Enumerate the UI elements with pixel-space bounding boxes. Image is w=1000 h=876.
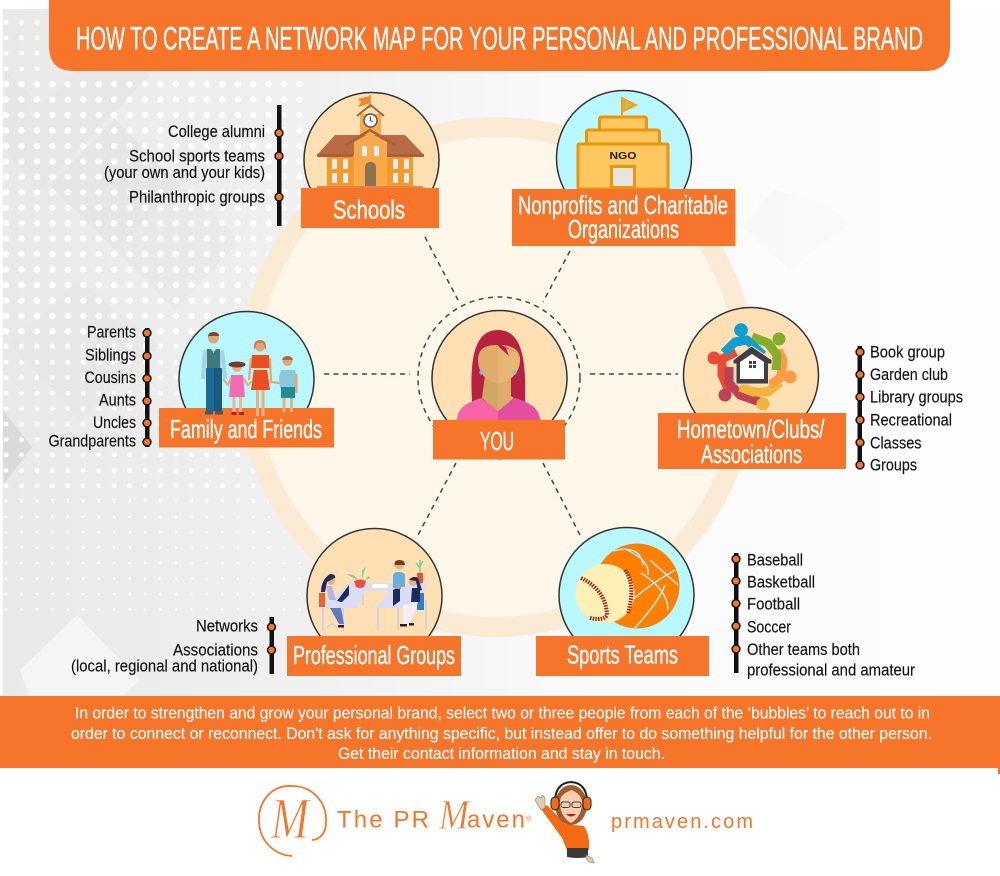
- panel: nonprofits: [512, 90, 736, 246]
- label: hometown: Associations: [701, 439, 802, 469]
- wordmark: ®: [526, 815, 532, 823]
- list: sports: [732, 552, 915, 680]
- bubble: hometown: [684, 308, 818, 442]
- bubble: family: [179, 312, 314, 446]
- list: sports: Other teams both: [747, 641, 860, 659]
- bubble: sports: [559, 528, 694, 662]
- icon: community ring with house: [708, 323, 796, 410]
- list: schools: Philanthropic groups: [129, 188, 265, 206]
- list: hometown: Garden club: [870, 366, 948, 384]
- bottom call to action band: In order to strengthen and grow your personal brand, select two or three people from each of the ‘bubbles’ to reach out to in: [75, 704, 930, 722]
- list: family: Uncles: [93, 414, 136, 432]
- list: family: Siblings: [85, 346, 136, 364]
- list: schools: [104, 105, 283, 226]
- label: family: [159, 408, 334, 448]
- list: sports: Basketball: [747, 574, 815, 592]
- list: schools: (your own and your kids): [104, 164, 265, 182]
- bottom call to action band: [0, 696, 1000, 774]
- list: sports: Soccer: [747, 618, 791, 636]
- label: schools: [301, 188, 439, 228]
- list: family: Cousins: [84, 369, 136, 387]
- list: hometown: Classes: [870, 434, 922, 452]
- label: nonprofits: [512, 189, 736, 246]
- icon: caricature with headphones: [535, 782, 594, 863]
- panel: you: [432, 310, 567, 460]
- large background circle: [247, 127, 747, 627]
- icon: NGO building: [578, 97, 668, 189]
- wordmark: aven: [467, 806, 525, 834]
- list: hometown: Recreational: [870, 412, 952, 430]
- list: hometown: Book group: [870, 344, 945, 362]
- list: professional: Associations: [173, 642, 258, 660]
- list: sports: professional and amateur: [747, 662, 915, 680]
- bottom call to action band: Get their contact information and stay in touch.: [338, 744, 665, 763]
- wordmark: M: [438, 793, 471, 839]
- label: sports: Sports Teams: [567, 640, 678, 670]
- label: professional: Professional Groups: [293, 640, 455, 670]
- list: sports: Football: [747, 596, 800, 614]
- wordmark: [337, 793, 532, 839]
- panel: professional groups: [71, 528, 461, 676]
- list: family: [48, 324, 151, 450]
- label: you: YOU: [480, 426, 514, 456]
- label: you: [433, 420, 565, 460]
- icon: M monogram circle: [259, 786, 326, 856]
- icon: office team at desks: [319, 560, 428, 631]
- bubble: you: [432, 310, 567, 446]
- bubble: nonprofits: [556, 90, 692, 226]
- icon: basketball and baseball: [576, 544, 680, 628]
- title banner: [49, 0, 950, 71]
- list: family: Parents: [87, 324, 136, 342]
- label: family: Family and Friends: [170, 414, 322, 444]
- list: professional: (local, regional and national): [71, 658, 258, 676]
- list: schools: School sports teams: [129, 148, 265, 166]
- url: prmaven.com: [611, 811, 753, 833]
- label: sports: [536, 636, 709, 676]
- label: schools: Schools: [333, 194, 405, 224]
- dashed connector lines: [324, 237, 678, 537]
- label: professional: [287, 636, 461, 676]
- panel: sports teams: [536, 528, 915, 680]
- bubble: professional: [307, 528, 442, 664]
- footer logo: The PR Maven: [259, 786, 753, 856]
- label: nonprofits: Nonprofits and Charitable: [518, 190, 728, 220]
- list: family: Aunts: [99, 392, 136, 410]
- list: sports: Baseball: [747, 552, 803, 570]
- label: hometown: [658, 413, 846, 469]
- icon: family figures: [201, 332, 298, 416]
- list: schools: College alumni: [168, 123, 265, 141]
- panel: hometown: [658, 308, 963, 474]
- list: professional: [71, 617, 275, 676]
- panel: family and friends: [48, 312, 334, 450]
- icon: NGO building: NGO: [610, 150, 636, 162]
- label: hometown: Hometown/Clubs/: [677, 414, 825, 444]
- icon: school building: [317, 95, 424, 188]
- bottom call to action band: order to connect or reconnect. Don't ask for anything specific, but instead offer to do something helpful for the other person.: [71, 724, 932, 743]
- list: professional: Networks: [196, 618, 258, 636]
- list: hometown: [856, 344, 963, 474]
- wordmark: The PR: [337, 806, 429, 834]
- bubble: schools: [304, 92, 439, 228]
- icon: M monogram circle: M: [270, 786, 311, 851]
- list: hometown: Groups: [870, 456, 917, 474]
- label: nonprofits: Organizations: [568, 214, 679, 244]
- list: hometown: Library groups: [870, 388, 963, 406]
- icon: woman portrait: [457, 330, 540, 420]
- list: family: Grandparents: [48, 432, 136, 450]
- panel: schools: [104, 92, 439, 228]
